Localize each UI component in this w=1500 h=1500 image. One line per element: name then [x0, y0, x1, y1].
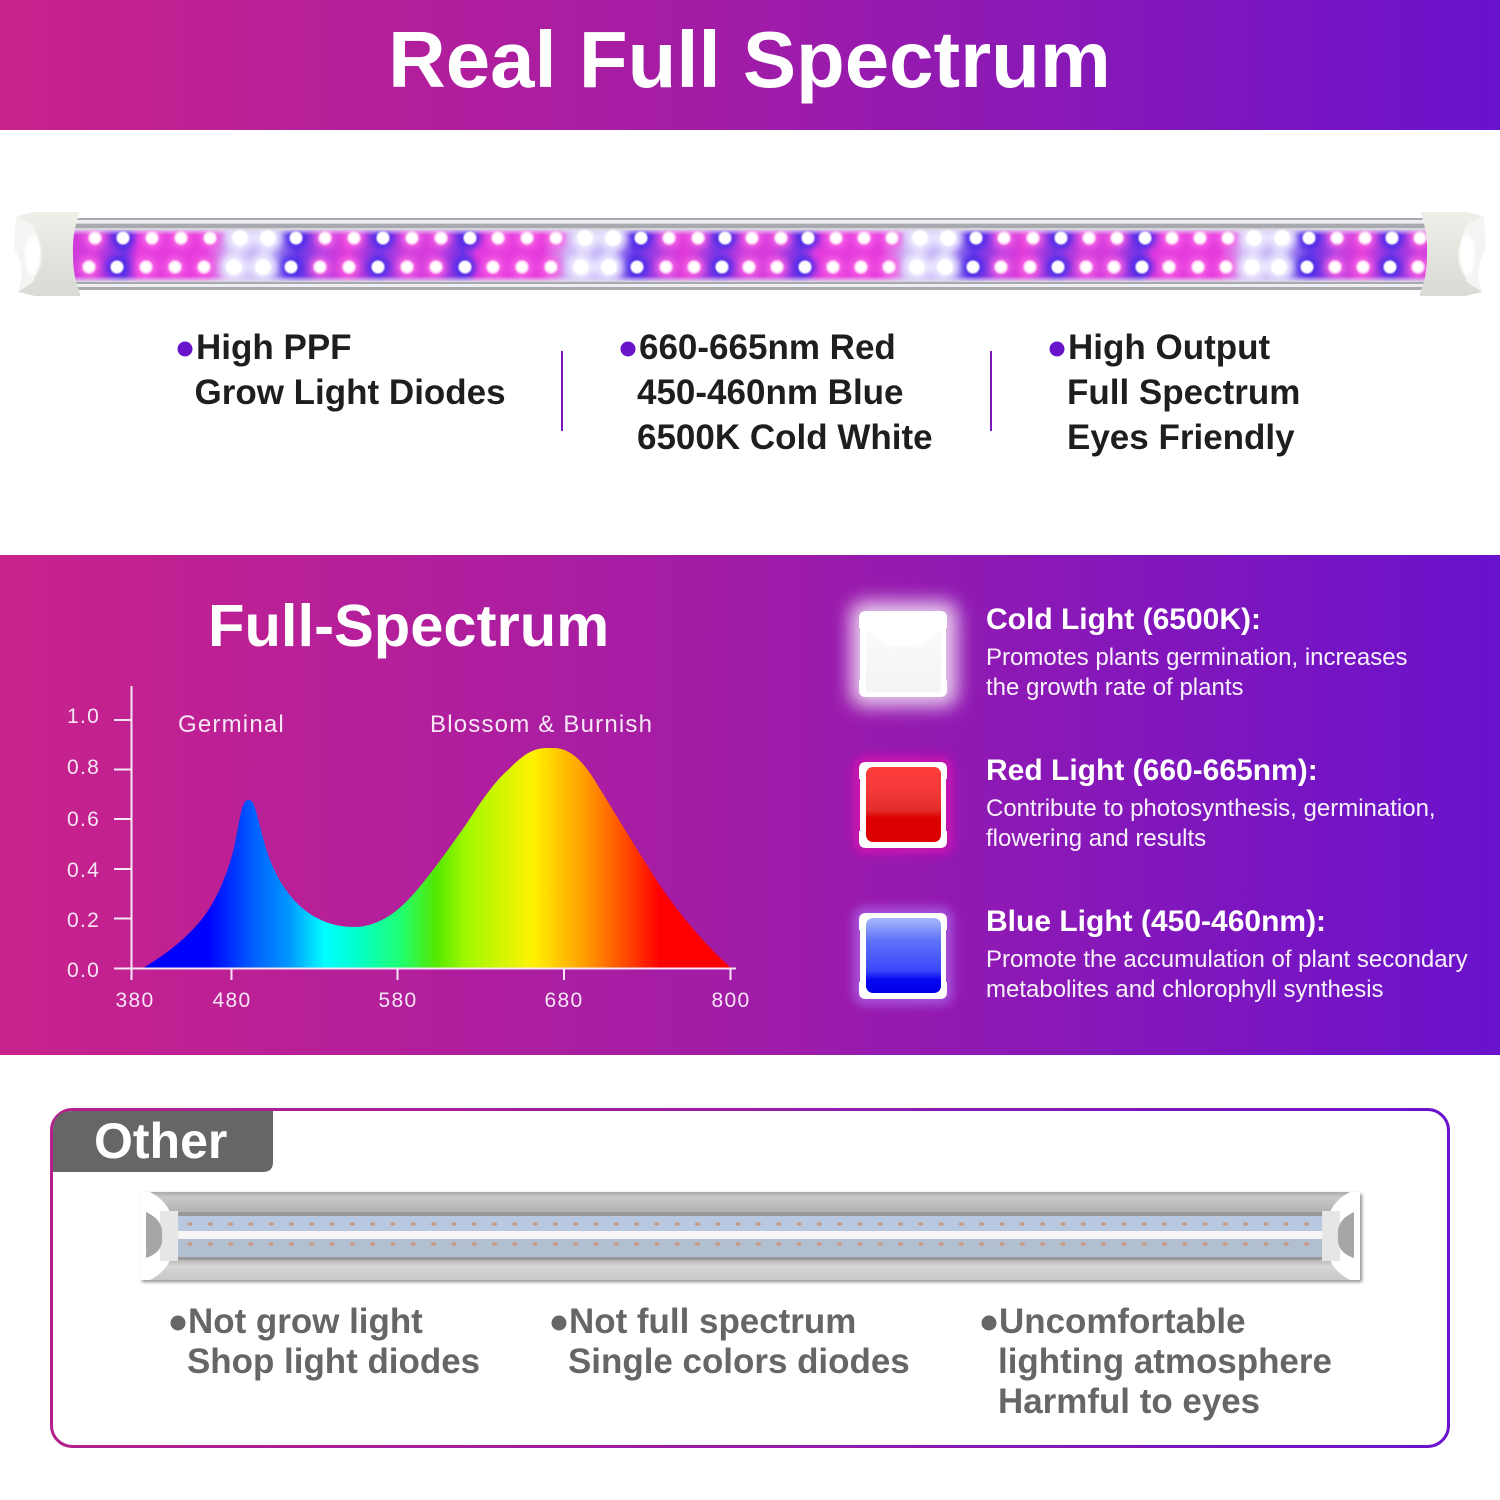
x axis labels: 580 [379, 989, 417, 1012]
title: Real Full Spectrum [388, 15, 1111, 104]
list: not grow light [170, 1302, 480, 1381]
list: not grow light: Not grow light [188, 1302, 423, 1341]
spectrum curve [143, 748, 731, 968]
icon: cold white LED [850, 601, 958, 707]
product photo: full spectrum LED tube [15, 212, 1485, 296]
text: blue light: metabolites and chlorophyll synthesis [986, 976, 1384, 1003]
text: cold light: Promotes plants germination, increases [986, 644, 1408, 671]
x axis labels: 680 [545, 989, 583, 1012]
list: uncomfortable: Uncomfortable [999, 1302, 1246, 1341]
text: red light: Red Light (660-665nm): [986, 754, 1318, 787]
feature list: wavelengths: 450-460nm Blue [637, 373, 904, 412]
panel: full spectrum [0, 555, 1500, 1055]
heading: Full-Spectrum: Full-Spectrum [208, 592, 609, 659]
list: not grow light: Shop light diodes [187, 1342, 480, 1381]
text: cold light: the growth rate of plants [986, 674, 1243, 701]
product photo: shop light [140, 1192, 1360, 1280]
y axis labels: 0.4 [67, 859, 100, 882]
x axis labels: 800 [712, 989, 750, 1012]
text: red light [986, 754, 1436, 852]
icon: blue LED [853, 907, 953, 1005]
y axis labels: 1.0 [67, 705, 100, 728]
feature list: diodes: High PPF [196, 328, 352, 367]
list: uncomfortable: Harmful to eyes [998, 1382, 1260, 1421]
tab: other: Other [94, 1113, 227, 1169]
right end [1322, 1192, 1360, 1280]
x axis labels: 380 [116, 989, 154, 1012]
y axis labels: 0.6 [67, 808, 100, 831]
feature list: wavelengths: 6500K Cold White [637, 418, 933, 457]
axes [114, 686, 736, 980]
right end cap [1420, 212, 1485, 296]
y axis labels [67, 705, 100, 982]
list: uncomfortable [982, 1302, 1332, 1421]
x axis labels [116, 989, 750, 1012]
text: red light: flowering and results [986, 825, 1206, 852]
y axis labels: 0.8 [67, 756, 100, 779]
divider [561, 351, 563, 431]
text: blue light: Blue Light (450-460nm): [986, 905, 1326, 938]
left end cap [15, 212, 80, 296]
feature list: wavelengths [620, 328, 933, 457]
left end [140, 1192, 178, 1280]
feature list: wavelengths: 660-665nm Red [639, 328, 896, 367]
feature list: output: Eyes Friendly [1067, 418, 1295, 457]
list: not full spectrum: Not full spectrum [569, 1302, 856, 1341]
panel: other [52, 1110, 1448, 1446]
feature list: output: Full Spectrum [1067, 373, 1300, 412]
text: cold light [986, 603, 1408, 701]
title banner [0, 0, 1500, 130]
text: blue light [986, 905, 1468, 1003]
label: blossom: Blossom & Burnish [430, 711, 653, 738]
divider [990, 351, 992, 431]
text: cold light: Cold Light (6500K): [986, 603, 1261, 636]
label: germinal: Germinal [178, 711, 285, 738]
x axis labels: 480 [213, 989, 251, 1012]
y axis labels: 0.0 [67, 959, 100, 982]
list: not full spectrum: Single colors diodes [568, 1342, 910, 1381]
spectrum chart [67, 686, 750, 1012]
list: uncomfortable: lighting atmosphere [998, 1342, 1332, 1381]
y axis labels: 0.2 [67, 909, 100, 932]
icon: red LED [853, 756, 953, 854]
text: blue light: Promote the accumulation of plant secondary [986, 946, 1468, 973]
feature list: output [1050, 328, 1300, 457]
feature list: output: High Output [1068, 328, 1271, 367]
feature list: diodes [178, 328, 506, 412]
feature list: diodes: Grow Light Diodes [194, 373, 506, 412]
text: red light: Contribute to photosynthesis, germination, [986, 795, 1436, 822]
list: not full spectrum [552, 1302, 910, 1381]
tab: other [53, 1111, 273, 1172]
